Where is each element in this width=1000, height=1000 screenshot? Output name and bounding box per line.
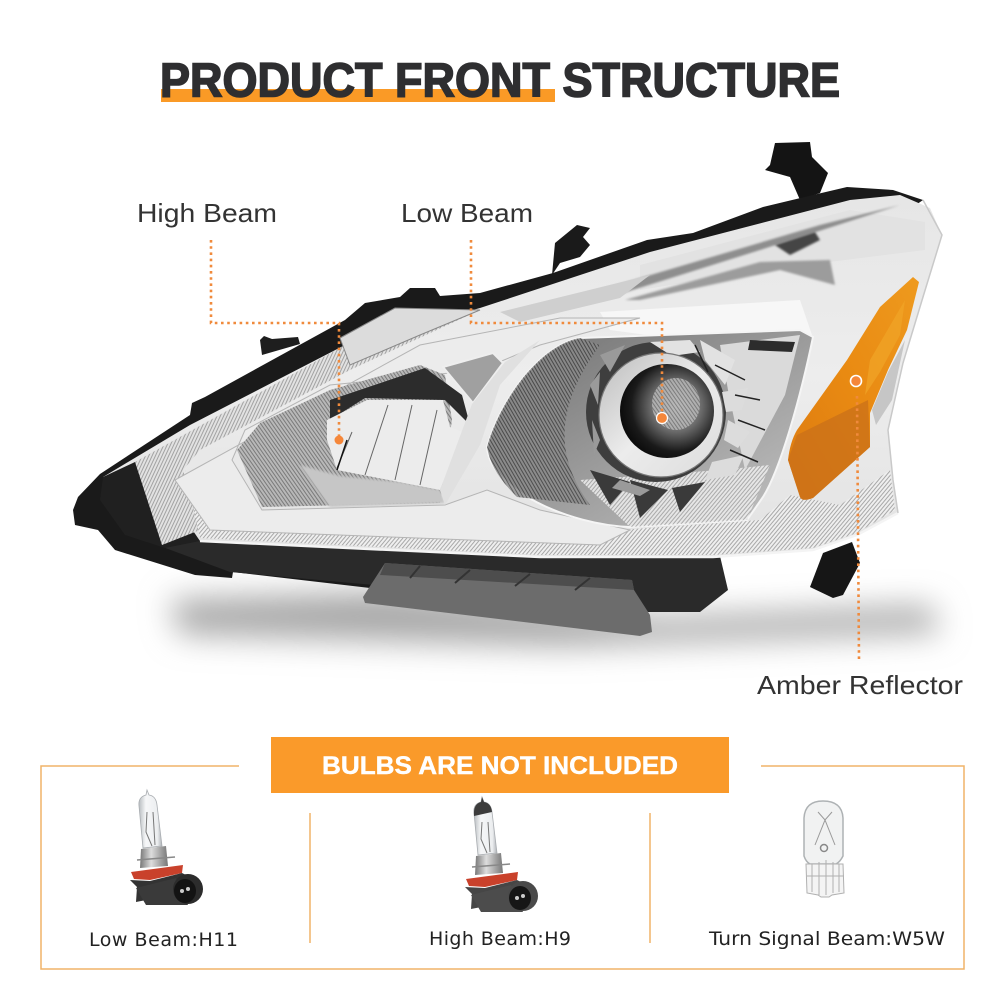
left reflector housing [237,365,452,507]
lens bottom edge [200,513,898,557]
chrome strut [440,340,540,505]
shroud fan blades [590,340,765,496]
projector lens highlight [652,378,700,430]
headlight product illustration [73,142,942,646]
amber side clear strip [872,340,905,425]
inner chrome frame left [175,318,640,545]
callout: High Beam: High Beam [137,198,277,228]
left black corner [100,462,200,548]
projector chrome ring [599,353,723,477]
left loop bracket [260,336,300,355]
under-lens dark band [160,540,728,612]
callout: High Beam [137,198,344,444]
upper clear detail [340,308,480,365]
label: High Beam H9: High Beam:H9 [429,928,571,950]
lower left reflection [300,465,445,507]
dark wedge above high beam [330,368,470,425]
left hatched fan [135,310,480,545]
clear lens body [103,195,942,557]
top connector tab [765,142,828,200]
top lens reflections [500,205,925,342]
small window reflector [443,353,503,403]
projector bowl [487,330,813,527]
middle mounting tab [552,225,590,275]
amber reflector [788,277,919,500]
bulb panel frame [41,766,964,969]
lens right edge [888,200,942,513]
grey mounting bracket [363,563,652,636]
bulb: H9 high beam [465,797,538,912]
ground shadow [170,592,940,646]
callout: Amber Reflector: Amber Reflector [757,670,963,700]
black housing outline [73,187,923,590]
bulb: H11 low beam [130,790,203,905]
title: PRODUCT FRONT STRUCTURE [160,54,840,108]
callout: Low Beam [401,198,668,424]
label: Turn Signal Beam W5W: Turn Signal Beam:W5W [708,928,945,950]
bulb: W5W turn signal [804,801,844,897]
banner: bulbs not included: BULBS ARE NOT INCLUDED [322,752,678,780]
projector shroud [586,342,726,482]
lower hatched band [185,470,895,555]
high beam reflector [327,400,463,490]
banner: bulbs not included [271,737,729,793]
projector lens [620,364,714,458]
label: Low Beam H11: Low Beam:H11 [89,929,238,951]
callout: Amber Reflector [757,376,963,700]
callout: Low Beam: Low Beam [401,198,533,228]
lower right connector [810,542,860,598]
